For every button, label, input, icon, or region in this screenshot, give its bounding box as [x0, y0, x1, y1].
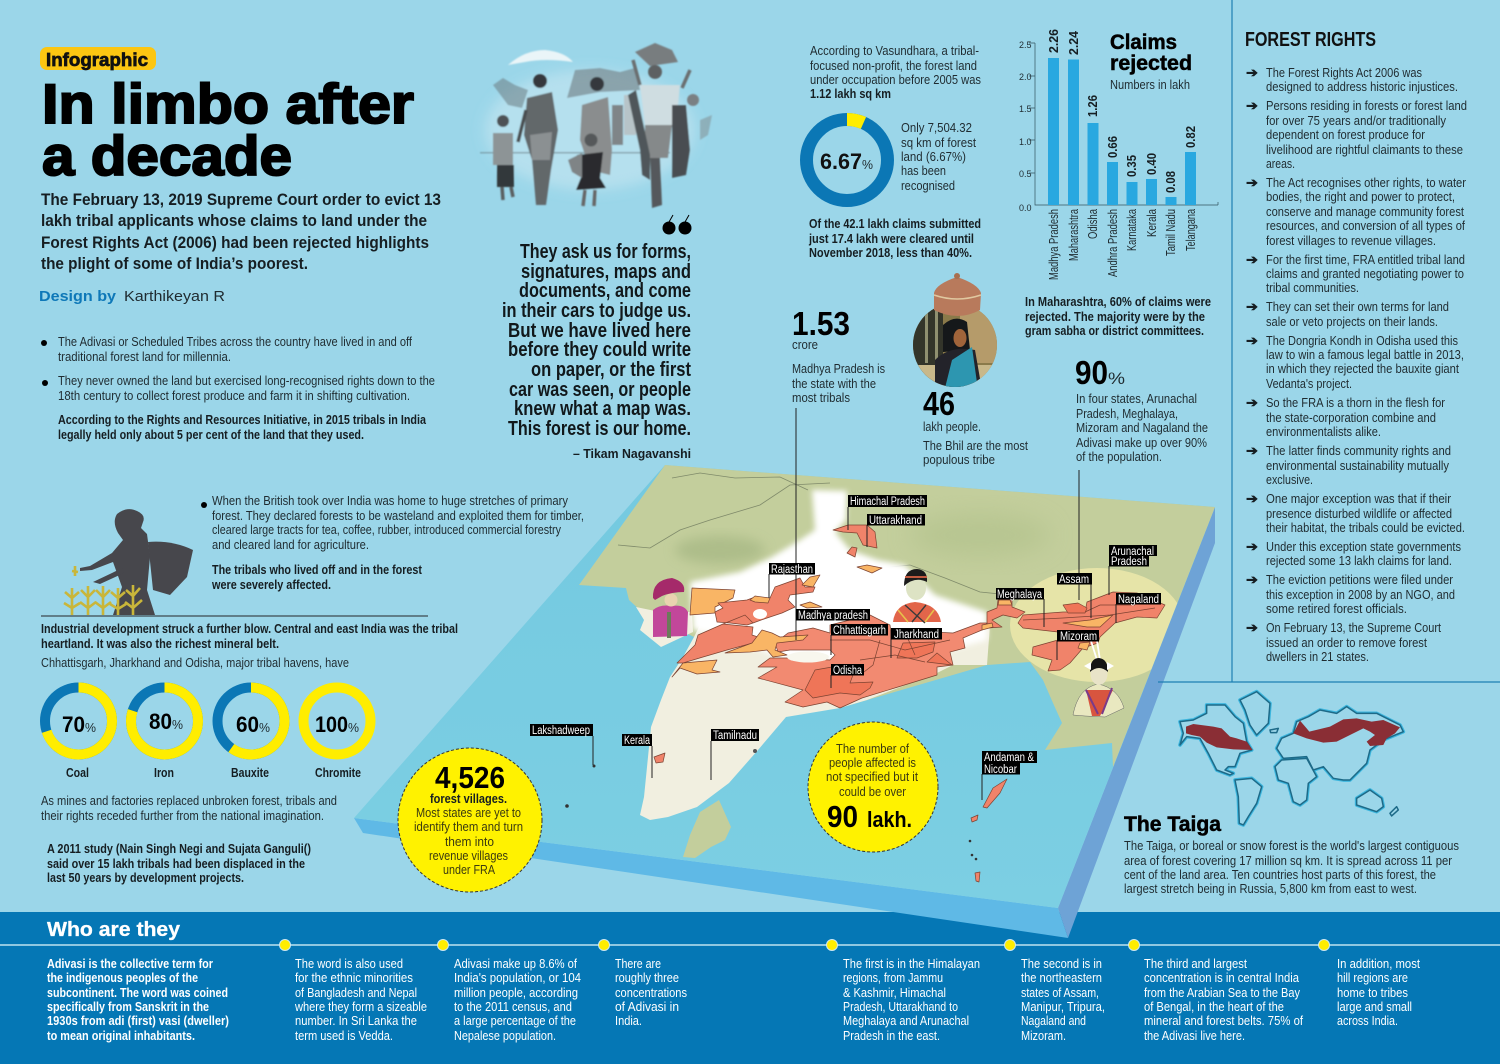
- tag: Infographic: Infographic: [46, 49, 148, 70]
- section: who are they: the Adivasi live here.: [1144, 1028, 1245, 1043]
- byline: Karthikeyan R: [124, 288, 225, 305]
- text block: industrial development: Chhattisgarh, Jharkhand and Odisha, major tribal havens, have: [41, 655, 349, 670]
- map state labels and leader lines: Arunachal: [1111, 546, 1154, 558]
- donut: 6.67% recognised: [806, 120, 888, 200]
- bar chart: claims rejected: 0.66: [1105, 136, 1120, 158]
- bar chart: claims rejected: 0.35: [1124, 155, 1139, 177]
- bar chart: claims rejected: Odisha: [1085, 208, 1100, 239]
- section: who are they: Pradesh in the east.: [843, 1028, 940, 1043]
- panel: forest rights: areas.: [1266, 156, 1295, 171]
- man carrying load: [635, 43, 678, 66]
- bar chart: claims rejected: Karnataka: [1124, 208, 1139, 251]
- text block: industrial development: heartland. It was also the richest mineral belt.: [41, 636, 279, 651]
- section: who are they: to the 2011 census, and: [454, 999, 572, 1014]
- section: who are they: mineral and forest belts. 75% of: [1144, 1013, 1303, 1028]
- icon: Jharkhand woman illustration: [893, 569, 941, 623]
- panel: forest rights: ➔: [1246, 65, 1258, 80]
- quote: They ask us for forms,: [520, 241, 691, 263]
- donut: bauxite 60%: Bauxite: [231, 765, 269, 780]
- text block: adivasi history bullets: traditional forest land for millennia.: [58, 349, 231, 364]
- callout: 4,526 forest villages: identify them and turn: [414, 820, 523, 834]
- bar chart: claims rejected: Andhra Pradesh: [1105, 209, 1120, 277]
- panel: forest rights: The Act recognises other rights, to water: [1266, 175, 1467, 190]
- donut: iron 80%: %: [172, 717, 183, 732]
- map state labels and leader lines: Nicobar: [984, 764, 1017, 776]
- panel: forest rights: ➔: [1246, 175, 1258, 190]
- text block: claims submitted: [808, 216, 981, 260]
- section: who are they: Adivasi is the collective term for: [47, 956, 213, 971]
- stat: 1.53 crore: 1.53: [792, 305, 850, 342]
- section: who are they: The third and largest: [1144, 956, 1247, 971]
- text block: Maharashtra: [1025, 294, 1211, 338]
- stat: 46 lakh people: populous tribe: [923, 452, 995, 467]
- stat: 1.53 crore: Madhya Pradesh is: [792, 361, 885, 376]
- section: who are they: concentrations: [615, 985, 687, 1000]
- quote: documents, and come: [519, 280, 691, 302]
- section: who are they: Who are they: [47, 919, 181, 941]
- section: who are they: The first is in the Himalayan: [843, 956, 980, 971]
- panel: forest rights: One major exception was that if their: [1266, 491, 1452, 506]
- text block: adivasi history bullets: According to the Rights and Resources Initiative, in 2015 tribals in India: [58, 412, 427, 427]
- section: who are they: The second is in: [1021, 956, 1102, 971]
- text block: Maharashtra: In Maharashtra, 60% of claims were: [1025, 294, 1211, 309]
- section: who are they: home to tribes: [1337, 985, 1408, 1000]
- text block: displacement: their rights receded further from the national imagination.: [41, 808, 324, 823]
- section: who are they: of Bengal, in the heart of the: [1144, 999, 1284, 1014]
- bar chart: claims rejected: Numbers in lakh: [1110, 77, 1190, 92]
- section: who are they: Manipur, Tripura,: [1021, 999, 1105, 1014]
- woman with bag: [590, 77, 604, 91]
- title: a decade: [42, 124, 292, 187]
- callout: 90 lakh affected: not specified but it: [826, 770, 918, 784]
- right woman: [672, 105, 690, 178]
- stat: 1.53 crore: [792, 305, 885, 405]
- panel: forest rights: ➔: [1246, 299, 1258, 314]
- text block: adivasi history bullets: legally held only about 5 per cent of the land that they used.: [58, 427, 364, 442]
- callout: 90 lakh affected: The number of: [836, 742, 909, 756]
- quote: on paper, or the first: [531, 359, 691, 381]
- section: who are they: a large percentage of the: [454, 1013, 576, 1028]
- bar chart: claims rejected: 0.82: [1183, 126, 1198, 148]
- panel: forest rights: [1245, 29, 1467, 664]
- text block: Vasundhara: focused non-profit, the forest land: [810, 58, 977, 73]
- section: who are they: India.: [615, 1013, 642, 1028]
- map state labels and leader lines: Mizoram: [1060, 631, 1097, 643]
- section: who are they: from the Arabian Sea to the Bay: [1144, 985, 1300, 1000]
- map state labels and leader lines: Himachal Pradesh: [850, 496, 925, 508]
- byline: [39, 288, 225, 305]
- bar chart: claims rejected: 1.0: [1019, 137, 1032, 147]
- panel: forest rights: The eviction petitions were filed under: [1266, 572, 1454, 587]
- quote: before they could write: [508, 339, 691, 361]
- donut: iron 80%: [131, 688, 198, 780]
- stat: 46 lakh people: lakh people.: [923, 419, 981, 434]
- quote: [502, 241, 691, 461]
- panel: forest rights: issued an order to remove forest: [1266, 635, 1427, 650]
- panel: forest rights: for over 75 years and/or traditionally: [1266, 113, 1446, 128]
- donut: iron 80%: Iron: [154, 765, 174, 780]
- text block: Vasundhara: According to Vasundhara, a tribal-: [810, 43, 979, 58]
- stat: 90% adivasi population: of the population.: [1076, 449, 1162, 464]
- text block: industrial development: [41, 621, 458, 670]
- little girl: [584, 134, 598, 146]
- stat: 90% adivasi population: Mizoram and Nagaland the: [1076, 420, 1208, 435]
- byline: Design by: [39, 288, 117, 305]
- woman in sari: [533, 74, 547, 88]
- section: who are they: regions, from Jammu: [843, 970, 943, 985]
- callout: 4,526 forest villages: revenue villages: [429, 849, 508, 863]
- panel: forest rights: the state-corporation combine and: [1266, 410, 1436, 425]
- donut: chromite 100%: Chromite: [315, 765, 361, 780]
- section: who are they: to mean original inhabitants.: [47, 1028, 195, 1043]
- text block: claims submitted: just 17.4 lakh were cleared until: [808, 231, 974, 246]
- panel: forest rights: some retired forest officials.: [1266, 601, 1407, 616]
- donut: bauxite 60%: [218, 688, 284, 780]
- photo: displaced tribal families walking: [480, 43, 712, 208]
- section: who are they: The word is also used: [295, 956, 403, 971]
- map state labels and leader lines: Madhya pradesh: [798, 610, 868, 622]
- section: who are they: where they form a sizeable: [294, 999, 427, 1014]
- text block: adivasi history bullets: They never owned the land but exercised long-recognised rights down to the: [58, 373, 435, 388]
- section: who are they: Nepalese population.: [454, 1028, 556, 1043]
- donut: iron 80%: 80: [149, 709, 172, 734]
- section: who are they: term used is Vedda.: [295, 1028, 393, 1043]
- bar chart: claims rejected: Claims: [1110, 31, 1177, 54]
- map state labels and leader lines: Uttarakhand: [869, 515, 922, 527]
- panel: forest rights: The latter finds community rights and: [1266, 443, 1451, 458]
- panel: forest rights: Vedanta's project.: [1266, 376, 1352, 391]
- text block: the taiga: The Taiga: [1124, 813, 1221, 836]
- map state labels and leader lines: Chhattisgarh: [833, 625, 886, 637]
- callout: 90 lakh affected: [808, 722, 938, 852]
- section: who are they: hill regions are: [1337, 970, 1408, 985]
- bar chart: claims rejected: 1.26: [1085, 95, 1100, 117]
- stat: 1.53 crore: most tribals: [792, 390, 850, 405]
- stat: 90% adivasi population: 90: [1075, 354, 1108, 391]
- section: who are they: Nagaland and: [1021, 1013, 1086, 1028]
- text block: British rule: The tribals who lived off and in the forest: [212, 562, 423, 577]
- text block: adivasi history bullets: [41, 334, 435, 442]
- text block: forest land recognised: land (6.67%): [901, 149, 966, 164]
- callout: 90 lakh affected: lakh.: [867, 807, 912, 832]
- intro paragraph: The February 13, 2019 Supreme Court order to evict 13: [41, 190, 441, 209]
- section: who are they: [0, 919, 1500, 1043]
- stat: 46 lakh people: 46: [923, 385, 955, 422]
- panel: forest rights: Persons residing in forests or forest land: [1266, 98, 1467, 113]
- panel: forest rights: ➔: [1246, 98, 1258, 113]
- map state labels and leader lines: Lakshadweep: [532, 725, 590, 737]
- donut: 6.67% recognised: %: [862, 157, 873, 172]
- text block: forest land recognised: has been: [901, 163, 946, 178]
- donut: coal 70%: Coal: [66, 765, 89, 780]
- bar chart: claims rejected: 0.0: [1019, 203, 1032, 213]
- text block: British rule: and cleared land for agriculture.: [212, 537, 369, 552]
- callout: 4,526 forest villages: 4,526: [435, 760, 505, 795]
- text block: forest land recognised: [901, 120, 976, 193]
- bar chart: claims rejected: 2.24: [1066, 30, 1081, 55]
- donut: chromite 100%: [304, 688, 370, 780]
- bar chart: claims rejected: 0.40: [1144, 153, 1159, 175]
- panel: forest rights: dependent on forest produce for: [1266, 127, 1426, 142]
- panel: forest rights: sale or veto projects on their lands.: [1266, 314, 1438, 329]
- text block: displacement: said over 15 lakh tribals had been displaced in the: [47, 856, 305, 871]
- panel: forest rights: their habitat, the tribals could be evicted.: [1266, 520, 1465, 535]
- section: who are they: subcontinent. The word was coined: [47, 985, 228, 1000]
- quote: in their cars to judge us.: [502, 300, 691, 322]
- map state labels and leader lines: Pradesh: [1111, 556, 1147, 568]
- bar chart: claims rejected: 0.5: [1019, 169, 1032, 179]
- icon: tribal woman with basket photo: [913, 273, 1000, 390]
- bar chart: claims rejected: rejected: [1110, 52, 1192, 75]
- text block: the taiga: cent of the land area. Ten countries host parts of this forest, the: [1124, 867, 1436, 882]
- panel: forest rights: On February 13, the Supreme Court: [1266, 620, 1441, 635]
- text block: Vasundhara: under occupation before 2005 was: [810, 72, 981, 87]
- stat: 1.53 crore: the state with the: [792, 376, 876, 391]
- callout: 90 lakh affected: could be over: [839, 785, 906, 799]
- map state labels and leader lines: Kerala: [624, 735, 650, 747]
- bar chart: claims rejected: [1019, 29, 1218, 280]
- text block: claims submitted: November 2018, less than 40%.: [809, 245, 972, 260]
- donut: chromite 100%: %: [348, 720, 359, 735]
- left child: [497, 115, 509, 127]
- section: who are they: Mizoram.: [1021, 1028, 1066, 1043]
- panel: forest rights: environmental sustainability mutually: [1266, 458, 1449, 473]
- stat: 90% adivasi population: Pradesh, Meghalaya,: [1076, 406, 1178, 421]
- stat: 90% adivasi population: [1075, 354, 1208, 464]
- intro paragraph: [41, 190, 441, 273]
- panel: forest rights: exclusive.: [1266, 472, 1313, 487]
- section: who are they: specifically from Sanskrit in the: [47, 999, 209, 1014]
- bar chart: claims rejected: Maharashtra: [1066, 208, 1081, 261]
- world map: taiga extent: [1180, 692, 1403, 825]
- central tribal belt: [654, 525, 1165, 882]
- panel: forest rights: The Dongria Kondh in Odisha used this: [1266, 333, 1458, 348]
- stat: 46 lakh people: [923, 385, 1028, 467]
- stat: 1.53 crore: crore: [792, 337, 818, 352]
- bar chart: claims rejected: Tamil Nadu: [1163, 209, 1178, 256]
- text block: Maharashtra: gram sabha or district committees.: [1025, 323, 1204, 338]
- panel: forest rights: ➔: [1246, 539, 1258, 554]
- intro paragraph: Forest Rights Act (2006) had been rejected highlights: [41, 233, 429, 252]
- stat: 46 lakh people: The Bhil are the most: [923, 438, 1028, 453]
- map state labels and leader lines: Assam: [1059, 574, 1089, 586]
- panel: forest rights: ➔: [1246, 620, 1258, 635]
- section: who are they: the indigenous peoples of the: [47, 970, 198, 985]
- callout: 4,526 forest villages: Most states are yet to: [416, 806, 521, 820]
- map state labels and leader lines: Andaman &: [984, 752, 1034, 764]
- panel: forest rights: forest villages to revenue villages.: [1266, 233, 1436, 248]
- icon: woman harvesting silhouette: [64, 509, 193, 615]
- quote: This forest is our home.: [508, 418, 691, 440]
- panel: forest rights: dwellers in 21 states.: [1266, 649, 1369, 664]
- quote: knew what a map was.: [514, 398, 691, 420]
- panel: forest rights: bodies, the right and power to protect,: [1266, 189, 1455, 204]
- bar chart: claims rejected: 1.5: [1019, 104, 1032, 114]
- quote: car was seen, or people: [509, 379, 691, 401]
- donut: coal 70%: [45, 688, 112, 780]
- map state labels and leader lines: Jharkhand: [894, 629, 939, 641]
- map state labels and leader lines: Tamilnadu: [713, 730, 757, 742]
- donut: coal 70%: 70: [62, 712, 85, 737]
- bar chart: claims rejected: 2.5: [1019, 40, 1032, 50]
- stat: 90% adivasi population: Adivasi make up over 90%: [1076, 435, 1207, 450]
- section: who are they: large and small: [1337, 999, 1412, 1014]
- bar chart: claims rejected: 2.0: [1019, 72, 1032, 82]
- section: who are they: number. In Sri Lanka the: [295, 1013, 417, 1028]
- section: who are they: roughly three: [615, 970, 679, 985]
- section: who are they: the northeastern: [1021, 970, 1102, 985]
- section: who are they: of Bangladesh and Nepal: [295, 985, 417, 1000]
- section: who are they: across India.: [1337, 1013, 1398, 1028]
- panel: forest rights: For the first time, FRA entitled tribal land: [1266, 252, 1465, 267]
- panel: forest rights: this exception in 2008 by an NGO, and: [1266, 587, 1455, 602]
- title: In limbo after: [42, 72, 414, 135]
- title: [42, 72, 414, 187]
- map of India on tilted slab: [354, 465, 1215, 938]
- bar chart: claims rejected: Telangana: [1183, 208, 1198, 251]
- map state labels and leader lines: Nagaland: [1118, 594, 1159, 606]
- text block: the taiga: area of forest covering 17 million sq km. It is spread across 11 per: [1124, 853, 1453, 868]
- text block: displacement: As mines and factories replaced unbroken forest, tribals and: [41, 793, 337, 808]
- callout: 4,526 forest villages: [398, 748, 542, 892]
- callout: 90 lakh affected: 90: [827, 799, 858, 834]
- section: who are they: Meghalaya and Arunachal: [843, 1013, 969, 1028]
- callout: 4,526 forest villages: them into: [445, 835, 494, 849]
- text block: British rule: [201, 493, 584, 592]
- text block: British rule: were severely affected.: [211, 577, 331, 592]
- panel: forest rights: The Forest Rights Act 2006 was: [1266, 65, 1422, 80]
- quote: signatures, maps and: [521, 261, 691, 283]
- donut: bauxite 60%: %: [259, 720, 270, 735]
- section: who are they: 1930s from adi (first) vasi (dweller): [47, 1013, 229, 1028]
- donut: chromite 100%: 100: [315, 712, 348, 737]
- panel: forest rights: They can set their own terms for land: [1266, 299, 1449, 314]
- section: who are they: of Adivasi in: [615, 999, 679, 1014]
- donut: 6.67% recognised: 6.67: [820, 149, 862, 174]
- text block: displacement: last 50 years by development projects.: [47, 870, 244, 885]
- map state labels and leader lines: Rajasthan: [771, 564, 813, 576]
- panel: forest rights: resources, and conversion of all types of: [1266, 218, 1465, 233]
- text block: forest land recognised: sq km of forest: [901, 135, 976, 150]
- panel: forest rights: Under this exception state governments: [1266, 539, 1461, 554]
- panel: forest rights: tribal communities.: [1266, 280, 1359, 295]
- section: who are they: states of Assam,: [1021, 985, 1099, 1000]
- quote: – Tikam Nagavanshi: [573, 446, 691, 461]
- text block: forest land recognised: recognised: [901, 178, 955, 193]
- panel: forest rights: ➔: [1246, 443, 1258, 458]
- text block: displacement: [41, 793, 337, 885]
- intro paragraph: the plight of some of India’s poorest.: [41, 254, 308, 273]
- bar chart: claims rejected: Madhya Pradesh: [1046, 209, 1061, 280]
- panel: forest rights: FOREST RIGHTS: [1245, 29, 1376, 51]
- intro paragraph: lakh tribal applicants whose claims to land under the: [41, 211, 427, 230]
- panel: forest rights: law to win a famous legal battle in 2013,: [1266, 347, 1464, 362]
- panel: forest rights: ➔: [1246, 252, 1258, 267]
- text block: forest land recognised: Only 7,504.32: [901, 120, 972, 135]
- donut: bauxite 60%: 60: [236, 712, 259, 737]
- panel: forest rights: environmentalists alike.: [1266, 424, 1381, 439]
- panel: forest rights: designed to address historic injustices.: [1266, 79, 1458, 94]
- panel: forest rights: rejected some 13 lakh claims for land.: [1266, 553, 1452, 568]
- section: who are they: Adivasi make up 8.6% of: [454, 956, 577, 971]
- callout: 4,526 forest villages: under FRA: [443, 863, 496, 877]
- text block: Vasundhara: 1.12 lakh sq km: [810, 86, 891, 101]
- panel: forest rights: livelihood are rightful claimants to these: [1266, 142, 1463, 157]
- map state labels and leader lines: [530, 408, 1161, 800]
- panel: forest rights: So the FRA is a thorn in the flesh for: [1266, 395, 1446, 410]
- icon: Rajasthani man illustration: [653, 578, 688, 638]
- panel: forest rights: ➔: [1246, 333, 1258, 348]
- panel: forest rights: claims and granted negotiating power to: [1266, 266, 1464, 281]
- section: who are they: for the ethnic minorities: [295, 970, 413, 985]
- stat: 90% adivasi population: In four states, Arunachal: [1076, 391, 1197, 406]
- text block: British rule: When the British took over India was home to huge stretches of primary: [212, 493, 568, 508]
- callout: 4,526 forest villages: forest villages.: [430, 791, 507, 806]
- section: who are they: In addition, most: [1337, 956, 1420, 971]
- section: who are they: concentration is in central India: [1144, 970, 1300, 985]
- bar chart: claims rejected: 2.26: [1046, 29, 1061, 53]
- callout: 90 lakh affected: people affected is: [829, 756, 916, 770]
- panel: forest rights: in which they rejected the bauxite giant: [1266, 361, 1459, 376]
- map state labels and leader lines: Meghalaya: [997, 589, 1042, 601]
- section: who are they: India's population, or 104: [454, 970, 581, 985]
- section: who are they: & Kashmir, Himachal: [843, 985, 946, 1000]
- stat: 90% adivasi population: %: [1108, 369, 1125, 388]
- text block: the taiga: largest stretch being in Russia, 5,800 km from east to west.: [1124, 881, 1417, 896]
- section: who are they: There are: [615, 956, 661, 971]
- panel: forest rights: presence disturbed wildlife or affected: [1266, 506, 1452, 521]
- donut: coal 70%: %: [85, 720, 96, 735]
- bar chart: claims rejected: 0.08: [1163, 171, 1178, 193]
- quote: But we have lived here: [508, 320, 691, 342]
- text block: British rule: cleared large tracts for tea, coffee, rubber, introduced commercial forestry: [212, 522, 561, 537]
- section: who are they: Pradesh, Uttarakhand to: [843, 999, 958, 1014]
- text block: displacement: A 2011 study (Nain Singh Negi and Sujata Ganguli(): [47, 841, 311, 856]
- map state labels and leader lines: Odisha: [833, 665, 862, 677]
- icon: Naga man illustration: [1073, 641, 1124, 717]
- text block: adivasi history bullets: The Adivasi or Scheduled Tribes across the country have lived in and off: [58, 334, 412, 349]
- panel: forest rights: ➔: [1246, 395, 1258, 410]
- text block: Vasundhara: [810, 43, 981, 101]
- text block: British rule: forest. They declared forests to be wasteland and exploited them for timber,: [212, 508, 584, 523]
- bottom band: who are they background: [0, 912, 1500, 1064]
- bar chart: claims rejected: Kerala: [1144, 208, 1159, 237]
- text block: claims submitted: Of the 42.1 lakh claims submitted: [809, 216, 981, 231]
- panel: forest rights: ➔: [1246, 572, 1258, 587]
- text block: the taiga: [1124, 813, 1459, 896]
- quote marks: [662, 215, 692, 234]
- panel: forest rights: ➔: [1246, 491, 1258, 506]
- panel: forest rights: conserve and manage community forest: [1266, 204, 1464, 219]
- section: who are they: million people, according: [454, 985, 578, 1000]
- text block: adivasi history bullets: 18th century to collect forest produce and farm it in shifting cultivation.: [58, 388, 410, 403]
- text block: industrial development: Industrial development struck a further blow. Central and east India was the tribal: [41, 621, 458, 636]
- text block: Maharashtra: rejected. The majority were by the: [1025, 309, 1205, 324]
